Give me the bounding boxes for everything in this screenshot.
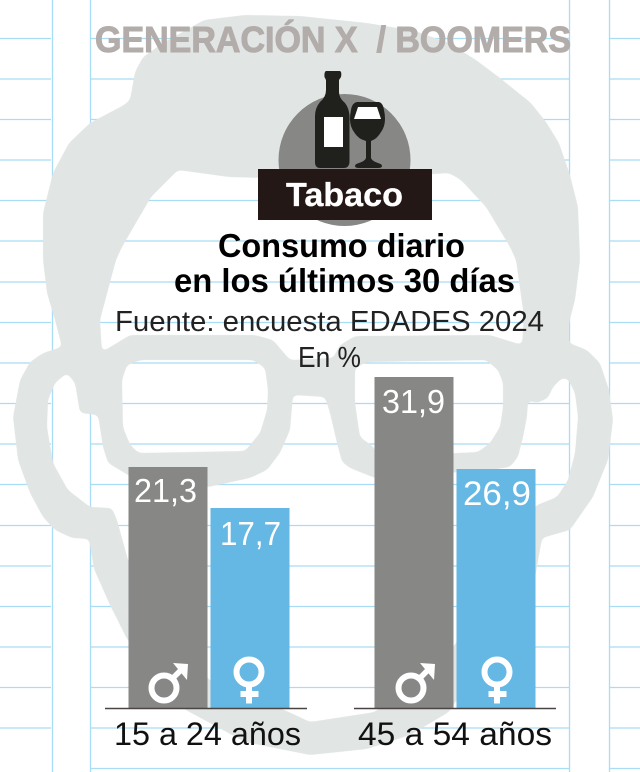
bar: men 21,3: 21,3: [134, 472, 197, 509]
label box: Tabaco: [258, 169, 432, 220]
bar: women 17,7: 17,7: [220, 515, 281, 552]
source note: Fuente: encuesta EDADES 2024: [115, 306, 544, 338]
axis label: 15 a 24 años: [114, 716, 301, 752]
bar: men 31,9: 31,9: [382, 383, 445, 420]
bar: men 31,9: [374, 377, 454, 708]
icon: female symbol: [236, 660, 262, 704]
source note: [115, 306, 544, 374]
bar chart: 15 a 24 años: [105, 467, 307, 752]
icon: male symbol: [398, 663, 435, 700]
source note: En %: [298, 342, 361, 374]
icon: wine bottle and glass in circle: [278, 71, 410, 226]
bar: women 26,9: [456, 469, 536, 708]
icon: female symbol: [484, 660, 510, 704]
bar: men 21,3: [128, 467, 208, 708]
chart title: en los últimos 30 días: [174, 262, 515, 299]
bar chart: 45 a 54 años: [354, 377, 556, 752]
chart title: [174, 227, 515, 299]
bar: women 17,7: [210, 508, 290, 708]
label box: Tabaco: Tabaco: [286, 176, 403, 213]
axis label: 45 a 54 años: [358, 716, 552, 752]
bar: women 26,9: 26,9: [463, 475, 531, 513]
icon: male symbol: [152, 663, 188, 700]
chart title: Consumo diario: [218, 227, 465, 264]
heading: generation label: GENERACIÓN X / BOOMERS: [95, 18, 571, 60]
